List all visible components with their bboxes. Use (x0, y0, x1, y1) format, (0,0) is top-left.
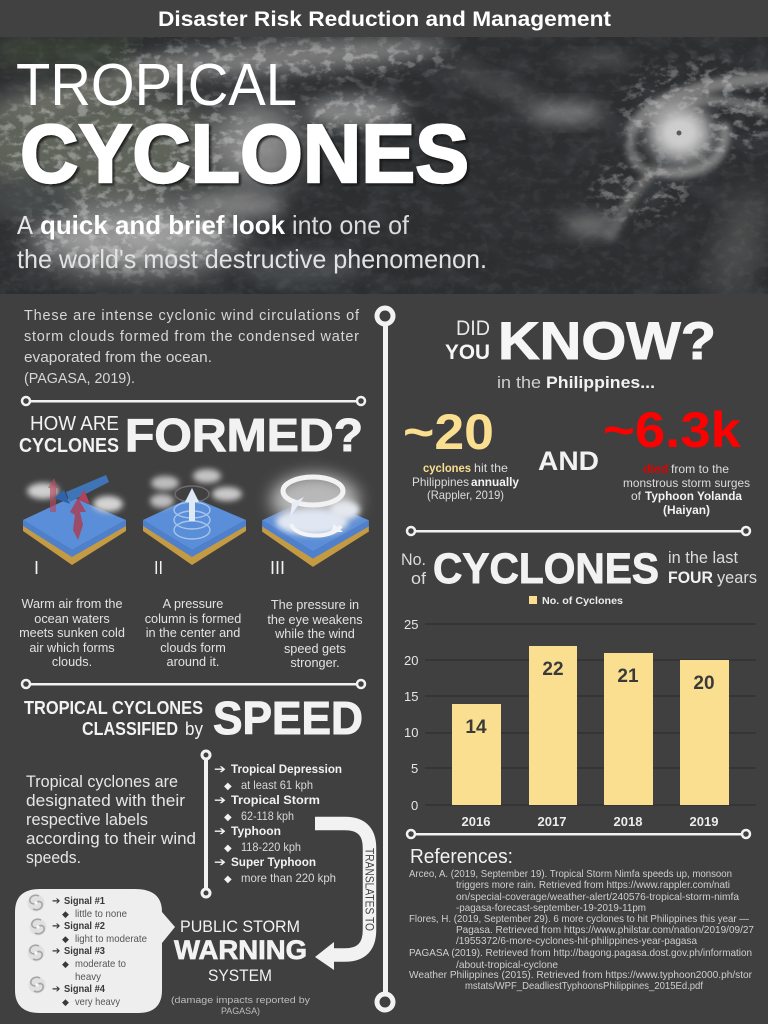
speed categories list: ➔ (214, 855, 226, 869)
stage III caption: while the wind (274, 627, 355, 641)
stage III caption: The pressure in (271, 598, 359, 612)
y axis labels: 10 (404, 725, 418, 740)
y axis labels: 15 (404, 689, 418, 704)
stat caption: monstrous storm surges (623, 476, 750, 490)
header band title: Disaster Risk Reduction and Management (158, 8, 611, 31)
x axis labels: 2019 (690, 814, 718, 829)
subheading: in the philippines (497, 373, 655, 392)
references list: -pagasa-forecast-september-19-2019-11pm (456, 902, 646, 914)
speed categories list: ◆ (224, 874, 232, 885)
signal list: ◆ (62, 998, 69, 1008)
note: damage impacts: PAGASA) (221, 1006, 260, 1017)
note: damage impacts: (damage impacts reported by (171, 995, 310, 1006)
stat caption: (Haiyan) (663, 503, 710, 517)
header band title (0, 0, 768, 37)
speed categories list: Tropical Depression (231, 762, 342, 776)
divider: speed (22, 680, 365, 688)
y axis labels: 25 (404, 617, 418, 632)
references list: Pagasa. Retrieved from https://www.philstar.com/nation/2019/09/27 (456, 924, 754, 936)
icon: stage II pressure column (143, 469, 246, 565)
stat caption: Typhoon Yolanda (645, 489, 742, 503)
references list: mstats/WPF_DeadliestTyphoonsPhilippines_2015Ed.pdf (465, 980, 703, 992)
heading: classified by speed: CLASSIFIED (82, 719, 178, 739)
speed categories list: more than 220 kph (241, 871, 336, 885)
bar values: 21 (617, 666, 639, 687)
stage II caption: column is formed (145, 612, 241, 626)
stat: about 20 cyclones: ~20 (403, 404, 494, 460)
heading: classified by speed: TROPICAL CYCLONES (24, 698, 203, 718)
stage I caption: meets sunken cold (19, 626, 125, 640)
divider: chart heading (407, 527, 750, 535)
heading: number of cyclones: of (411, 569, 426, 588)
stage III caption: the eye weakens (267, 613, 363, 627)
signal list: ◆ (62, 935, 69, 945)
speed categories list (214, 762, 342, 885)
heading: did you know: DID (456, 317, 490, 340)
references list (409, 868, 754, 992)
stat: about 6.3k died: ~6.3k (603, 402, 741, 458)
arrow: translates to: TRANSLATES TO (362, 848, 376, 931)
speed categories list: ➔ (214, 793, 226, 807)
intro paragraph (24, 308, 360, 387)
speed categories list: ➔ (214, 762, 226, 776)
note: damage impacts (171, 995, 310, 1017)
references list: /1955372/6-more-cyclones-hit-philippines-year-pagasa (456, 935, 697, 947)
wind speed description: respective labels (26, 811, 148, 829)
stage II caption: in the center and (146, 626, 240, 640)
heading: did you know: YOU (445, 341, 490, 364)
stat caption: (Rappler, 2019) (427, 488, 504, 502)
heading: how are cyclones formed (19, 409, 363, 461)
heading: number of cyclones: FOUR (668, 568, 713, 587)
signal list: moderate to (75, 958, 126, 970)
bar chart (404, 595, 756, 829)
heading: how are cyclones formed: HOW ARE (30, 413, 119, 435)
speed categories list: Typhoon (231, 824, 281, 838)
signal list: very heavy (75, 996, 121, 1008)
bars (452, 646, 729, 805)
stage II caption: clouds form (160, 641, 226, 655)
stage numerals: I (34, 558, 39, 578)
signal list: light to moderate (75, 933, 147, 945)
signal list: ➔ (52, 984, 60, 995)
gridlines (425, 624, 756, 805)
arrow: translates to (315, 824, 376, 970)
x axis labels: 2018 (614, 814, 642, 829)
y axis labels (404, 617, 418, 813)
speed list connector (202, 751, 210, 897)
speed categories list: at least 61 kph (241, 778, 313, 792)
speed categories list: 118-220 kph (241, 840, 301, 854)
heading: did you know: KNOW? (498, 312, 716, 371)
references list: Arceo, A. (2019, September 19). Tropical Storm Nimfa speeds up, monsoon (409, 868, 732, 880)
stage numerals: II (154, 558, 163, 578)
bar values: 14 (465, 717, 487, 738)
hero subtitle: into one of (292, 210, 410, 240)
stage III caption (267, 598, 363, 670)
stat caption: from to the (671, 462, 729, 476)
hero subtitle: quick and brief look (40, 210, 286, 240)
references list: Weather Philippines (2015). Retrieved from https://www.typhoon2000.ph/stor (409, 969, 752, 981)
heading: public storm warning system: WARNING (174, 935, 307, 965)
heading: number of cyclones: CYCLONES (433, 545, 659, 593)
references list: /about-tropical-cyclone (456, 959, 558, 971)
stage I caption: ocean waters (34, 612, 110, 626)
speed categories list: ◆ (224, 781, 232, 792)
references list: PAGASA (2019). Retrieved from http://bagong.pagasa.dost.gov.ph/information (409, 947, 752, 959)
divider: formed (22, 397, 365, 405)
heading: how are cyclones formed: CYCLONES (19, 435, 119, 457)
wind speed description (26, 773, 196, 867)
heading: number of cyclones: in the last (668, 548, 738, 567)
speed categories list: ➔ (214, 824, 226, 838)
heading: number of cyclones (401, 545, 757, 593)
stage III caption: stronger. (290, 656, 340, 670)
stage I caption: clouds. (52, 655, 92, 669)
heading: number of cyclones: years (717, 568, 757, 587)
signal list: Signal #1 (64, 895, 105, 907)
stat: about 20 cyclones (403, 404, 519, 502)
stat caption (412, 461, 519, 502)
signal list: ➔ (52, 921, 60, 932)
signal list: ➔ (52, 946, 60, 957)
bar values: 22 (542, 659, 564, 680)
subheading: in the philippines: in the (497, 373, 541, 392)
signal list: ◆ (62, 910, 69, 920)
divider: references (407, 830, 750, 838)
intro paragraph: (PAGASA, 2019). (24, 371, 135, 387)
hero title: cyclones: CYCLONES (20, 107, 469, 200)
x axis labels: 2016 (462, 814, 490, 829)
hero subtitle: A (17, 210, 34, 240)
hero satellite background (0, 31, 768, 307)
signal list: Signal #3 (64, 945, 105, 957)
bar values (465, 659, 715, 738)
heading: how are cyclones formed: FORMED? (125, 409, 363, 461)
stat caption: annually (471, 475, 519, 489)
signal list (52, 895, 147, 1008)
stage II caption (145, 597, 241, 669)
stat caption (623, 462, 750, 517)
wind speed description: Tropical cyclones are (26, 773, 178, 791)
signal list: Signal #4 (64, 983, 105, 995)
references list: on/special-coverage/weather-alert/240576-tropical-storm-nimfa (456, 891, 739, 903)
speed categories list: 62-118 kph (241, 809, 294, 823)
stage I caption: Warm air from the (21, 597, 123, 611)
y axis labels: 20 (404, 653, 418, 668)
stat caption: died (643, 462, 668, 476)
heading: public storm warning system: PUBLIC STORM (180, 917, 300, 936)
x axis labels (462, 814, 718, 829)
stage II caption: A pressure (163, 597, 223, 611)
heading: public storm warning system (174, 917, 307, 985)
speed categories list: Super Typhoon (231, 855, 316, 869)
stage III caption: speed gets (284, 642, 346, 656)
stage I caption (19, 597, 125, 669)
stage numerals: III (270, 558, 285, 578)
stat: about 6.3k died (603, 402, 750, 517)
hero subtitle (17, 210, 487, 274)
heading: classified by speed: SPEED (213, 692, 363, 744)
heading: references: References: (410, 846, 513, 868)
stage II caption: around it. (167, 655, 219, 669)
stage numerals (34, 558, 285, 578)
y axis labels: 5 (411, 761, 418, 776)
wind speed description: designated with their (26, 792, 186, 810)
panel: signal bubble (15, 889, 175, 1013)
hero subtitle: the world's most destructive phenomenon. (17, 244, 487, 274)
intro paragraph: evaporated from the ocean. (24, 350, 212, 366)
heading: classified by speed (24, 692, 363, 744)
intro paragraph: These are intense cyclonic wind circulations of (24, 308, 360, 324)
wind speed description: speeds. (26, 849, 81, 867)
icon: stage III eye and winds (262, 474, 369, 567)
speed categories list: Tropical Storm (231, 793, 320, 807)
central vertical timeline (377, 308, 393, 1010)
chart legend: No. of Cyclones (542, 595, 623, 607)
speed categories list: ◆ (224, 812, 232, 823)
heading: classified by speed: by (185, 719, 203, 739)
bar values: 20 (693, 673, 715, 694)
signal list: Signal #2 (64, 920, 105, 932)
intro paragraph: storm clouds formed from the condensed water (24, 329, 359, 345)
y axis labels: 0 (411, 798, 418, 813)
stage I caption: air which forms (29, 641, 115, 655)
hero title: tropical: TROPICAL (16, 52, 297, 118)
label: and: AND (538, 446, 599, 476)
stat caption: cyclones (423, 461, 471, 475)
stat caption: Philippines (412, 475, 469, 489)
signal list: ◆ (62, 960, 69, 970)
references list: triggers more rain. Retrieved from https://www.rappler.com/nati (456, 879, 730, 891)
signal list: heavy (75, 971, 102, 983)
signal list: little to none (75, 908, 127, 920)
heading: number of cyclones: No. (401, 550, 426, 569)
icon: signal swirls (28, 894, 46, 994)
references list: Flores, H. (2019, September 29). 6 more cyclones to hit Philippines this year — (409, 913, 749, 925)
signal list: ➔ (52, 896, 60, 907)
spiral bands (610, 78, 768, 235)
wind speed description: according to their wind (26, 830, 196, 848)
heading: public storm warning system: SYSTEM (208, 966, 272, 985)
speed categories list: ◆ (224, 843, 232, 854)
stat caption: of (631, 489, 642, 503)
stat caption: hit the (474, 461, 508, 475)
subheading: in the philippines: Philippines... (546, 373, 655, 392)
x axis labels: 2017 (538, 814, 566, 829)
icon: stage I warm and cold air (23, 475, 126, 565)
